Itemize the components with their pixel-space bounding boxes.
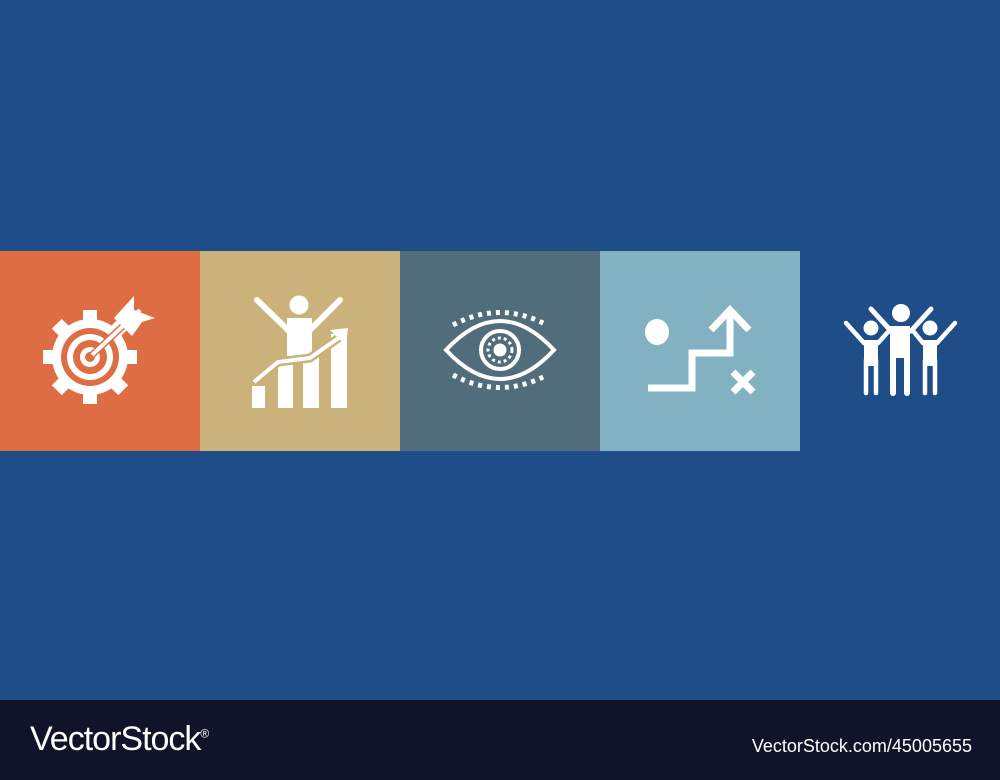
footer bar xyxy=(0,700,1000,780)
panel: slate vision xyxy=(400,251,600,451)
icon: stairs strategy xyxy=(645,310,753,392)
panel: orange target gear xyxy=(0,251,200,451)
icon: eye xyxy=(446,312,554,388)
image id text: VectorStock.com/45005655 xyxy=(752,736,972,756)
panel: light blue strategy xyxy=(600,251,800,451)
icon: person with chart xyxy=(252,296,348,408)
icon: gear with arrow xyxy=(43,296,155,404)
panel: tan growth xyxy=(200,251,400,451)
logo text: VectorStock® xyxy=(30,720,208,758)
icon: team of people xyxy=(846,304,955,393)
